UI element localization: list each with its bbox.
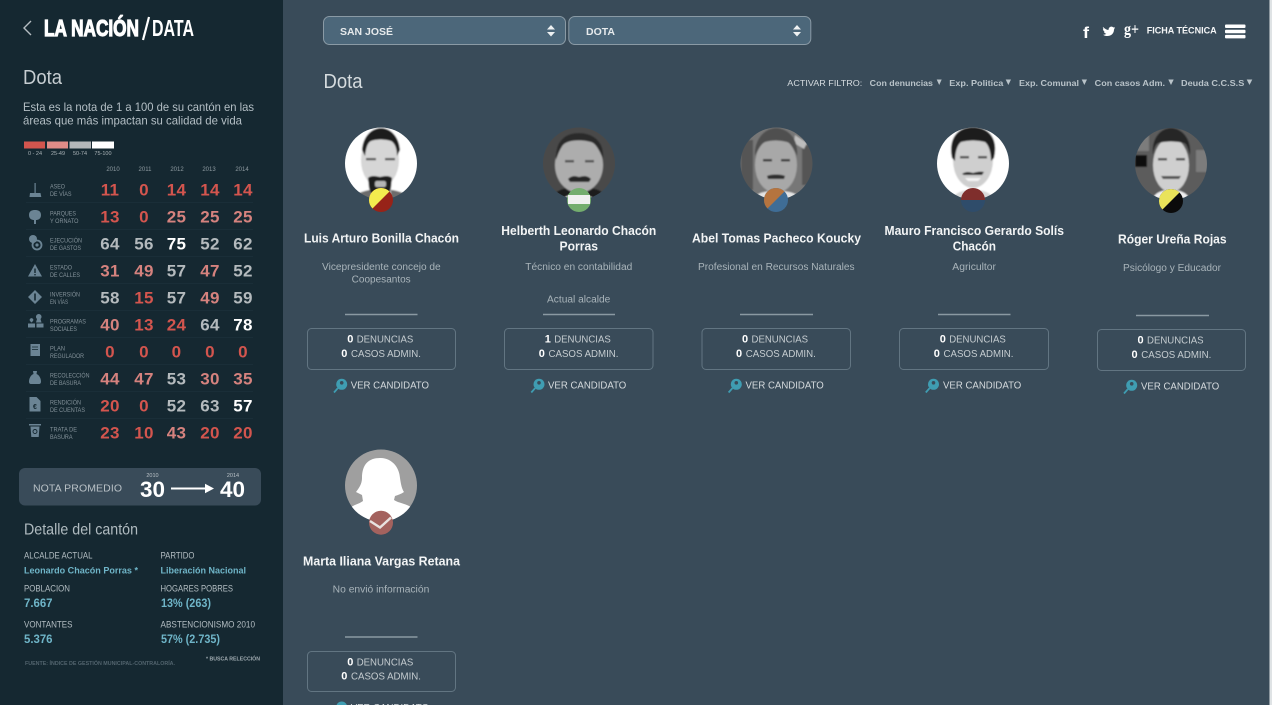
occupation: Psicólogo y Educador	[1123, 263, 1222, 274]
main heading: Dota	[324, 71, 363, 93]
row: aseo de vías: ASEO	[50, 185, 65, 191]
case counts	[900, 328, 1048, 370]
row: inversión en vías: 59	[233, 288, 253, 308]
panel: nota promedio: NOTA PROMEDIO	[33, 483, 122, 495]
link: ver candidato: VER CANDIDATO	[351, 380, 429, 391]
row: rendición de cuentas: €	[33, 404, 37, 411]
case counts: DENUNCIAS	[949, 335, 1006, 346]
portrait placeholder	[345, 449, 417, 524]
row: rendición de cuentas: DE CUENTAS	[50, 408, 85, 414]
row: ejecución de gastos: 62	[233, 234, 253, 254]
case counts: DENUNCIAS	[554, 335, 611, 346]
legend: 75-100	[94, 151, 112, 157]
intro text	[23, 100, 254, 128]
row: plan regulador: PLAN	[50, 347, 65, 353]
party badge	[961, 188, 985, 212]
case counts: 0	[1138, 335, 1144, 347]
row: rendición de cuentas: RENDICIÓN	[50, 400, 81, 407]
logo: La Nación / Data: LA NACIÓN	[44, 14, 139, 41]
row: estado de calles: DE CALLES	[50, 273, 80, 279]
main background	[283, 0, 1272, 705]
row: trata de basura: BASURA	[50, 435, 72, 441]
row: aseo de vías: 14	[233, 180, 253, 200]
case counts: CASOS ADMIN.	[351, 349, 421, 360]
case counts: 0	[341, 348, 347, 360]
legend: 50-74	[73, 151, 87, 157]
canton details: 5.376	[24, 634, 52, 646]
canton details: Liberación Nacional	[160, 566, 246, 577]
case counts: 0	[940, 334, 946, 346]
intro text: áreas que más impactan su calidad de vida	[23, 114, 242, 128]
candidate card: Róger Ureña Rojas	[1098, 123, 1246, 394]
name: Chacón	[953, 239, 996, 254]
row: aseo de vías: 14	[200, 180, 220, 200]
select: cantón: DOTA	[586, 26, 615, 38]
row: aseo de vías: 14	[167, 180, 186, 200]
row: trata de basura	[29, 424, 253, 442]
row: aseo de vías: 11	[101, 180, 119, 200]
row: plan regulador: 0	[238, 342, 248, 362]
year headers: 2014	[235, 167, 249, 173]
party badge	[369, 188, 393, 212]
select: cantón	[569, 16, 811, 44]
scrollbar edge	[1270, 0, 1272, 705]
row: plan regulador: REGULADOR	[50, 354, 85, 360]
case counts: CASOS ADMIN.	[944, 349, 1014, 360]
icon: twitter	[1103, 27, 1115, 36]
case counts: CASOS ADMIN.	[746, 349, 816, 360]
row: rendición de cuentas: 0	[139, 396, 149, 416]
row: aseo de vías	[30, 180, 253, 200]
social icons and menu	[1083, 20, 1246, 42]
row: plan regulador: 0	[105, 342, 115, 362]
row: rendición de cuentas	[30, 396, 253, 416]
row: ejecución de gastos: 75	[167, 234, 186, 254]
case counts: DENUNCIAS	[1147, 336, 1204, 347]
row: plan regulador: 0	[205, 342, 215, 362]
icon: facebook: f	[1083, 25, 1090, 42]
link: ver candidato	[1124, 380, 1220, 394]
legend	[24, 142, 114, 157]
name	[501, 223, 656, 254]
case counts: 0	[934, 348, 940, 360]
row: parques y ornato: Y ORNATO	[50, 219, 79, 225]
case counts: DENUNCIAS	[357, 335, 414, 346]
row: inversión en vías: 15	[134, 288, 154, 308]
case counts: CASOS ADMIN.	[548, 349, 618, 360]
row: trata de basura: TRATA DE	[50, 428, 77, 434]
status badge	[369, 511, 393, 535]
canton details: HOGARES POBRES	[160, 584, 233, 594]
panel: nota promedio: 2014	[227, 473, 239, 479]
name: Marta Iliana Vargas Retana	[303, 553, 461, 568]
row: parques y ornato: 25	[233, 208, 253, 226]
link: ver candidato	[926, 379, 1022, 392]
row: recolección de basura: 30	[200, 370, 220, 388]
link: ver candidato	[531, 379, 627, 392]
row: recolección de basura	[29, 370, 253, 388]
row: inversión en vías: EN VÍAS	[50, 299, 68, 306]
occupation: Agricultor	[952, 262, 997, 273]
name: Abel Tomas Pacheco Koucky	[692, 231, 862, 246]
occupation: No envió información	[333, 585, 429, 596]
row: estado de calles: 47	[200, 262, 220, 280]
canton details: ALCALDE ACTUAL	[24, 551, 92, 561]
canton details: 57% (2.735)	[161, 634, 220, 646]
candidate card: Helberth Leonardo Chacón Porras	[501, 122, 656, 392]
case counts: 0	[347, 334, 353, 346]
link: ver candidato	[334, 379, 429, 392]
row: trata de basura: 23	[100, 424, 120, 442]
filter bar: ACTIVAR FILTRO:	[787, 78, 862, 88]
case counts: DENUNCIAS	[357, 657, 414, 668]
case counts	[504, 328, 653, 370]
name	[884, 223, 1064, 254]
logo: La Nación / Data: DATA	[152, 15, 194, 41]
sidebar heading: Dota	[23, 67, 63, 89]
row: programas sociales: PROGRAMAS	[50, 320, 86, 326]
icon: back arrow	[24, 21, 31, 35]
row: trata de basura: 43	[167, 424, 186, 442]
heading: detalle del cantón: Detalle del cantón	[24, 522, 138, 539]
row: estado de calles: 31	[100, 262, 120, 280]
canton details: 7.667	[24, 598, 52, 610]
row: programas sociales: SOCIALES	[50, 327, 77, 333]
canton details: ABSTENCIONISMO 2010	[160, 620, 255, 630]
case counts: 1	[545, 334, 551, 346]
row: trata de basura: 20	[233, 424, 253, 442]
row: parques y ornato: 25	[167, 208, 186, 226]
row: parques y ornato: 0	[139, 208, 149, 226]
canton details: POBLACION	[24, 584, 70, 594]
row: rendición de cuentas: 57	[233, 396, 253, 416]
score table	[28, 180, 253, 442]
panel: nota promedio: 30	[140, 477, 165, 502]
case counts: 0	[1132, 349, 1138, 361]
case counts	[1098, 330, 1246, 370]
row: plan regulador: 0	[172, 342, 181, 362]
row dividers	[26, 202, 253, 418]
icon: menu	[1225, 24, 1246, 38]
canton details: Leonardo Chacón Porras *	[24, 566, 138, 577]
legend: 25-49	[51, 151, 65, 157]
case counts	[308, 328, 456, 370]
party badge	[764, 188, 788, 212]
panel: nota promedio: 40	[220, 477, 245, 502]
canton details: PARTIDO	[160, 551, 194, 561]
select: provincia: SAN JOSÉ	[340, 25, 393, 38]
link: ver candidato	[336, 702, 429, 705]
row: inversión en vías	[28, 288, 253, 308]
panel: sidebar	[0, 0, 283, 705]
candidate card: Abel Tomas Pacheco Koucky	[692, 122, 862, 392]
row: recolección de basura: 35	[233, 370, 253, 388]
portrait	[1135, 128, 1207, 198]
row: plan regulador: 0	[139, 342, 149, 362]
row: programas sociales: 24	[167, 316, 186, 334]
row: inversión en vías: INVERSIÓN	[50, 292, 80, 299]
case counts: 0	[539, 348, 545, 360]
case counts: CASOS ADMIN.	[1141, 350, 1211, 361]
name: Helberth Leonardo Chacón	[501, 223, 656, 238]
canton details: VONTANTES	[24, 620, 72, 630]
filter bar: Exp. Comunal	[1019, 78, 1079, 88]
canton details: 13% (263)	[161, 598, 211, 610]
row: estado de calles: 52	[233, 262, 253, 280]
year headers: 2012	[170, 167, 184, 173]
intro text: Esta es la nota de 1 a 100 de su cantón en las	[23, 100, 254, 114]
current mayor note: Actual alcalde	[547, 295, 611, 306]
row: inversión en vías: 58	[100, 288, 120, 308]
case counts: 0	[347, 656, 353, 668]
portrait	[740, 128, 812, 198]
row: estado de calles	[28, 262, 253, 280]
row: recolección de basura: DE BASURA	[50, 381, 81, 387]
occupation: Profesional en Recursos Naturales	[698, 262, 855, 273]
occupation	[322, 262, 441, 285]
link: ficha técnica: FICHA TÉCNICA	[1147, 26, 1217, 36]
portrait	[543, 128, 615, 198]
row: inversión en vías: 49	[200, 288, 220, 308]
row: aseo de vías: 0	[139, 180, 149, 200]
source note: FUENTE: ÍNDICE DE GESTIÓN MUNICIPAL-CONTRALORÍA.	[25, 659, 176, 667]
row: aseo de vías: DE VÍAS	[50, 191, 72, 198]
row: parques y ornato: 25	[200, 208, 220, 226]
row: ejecución de gastos	[29, 234, 253, 254]
occupation: Coopesantos	[352, 274, 411, 285]
year headers	[106, 167, 249, 173]
filter bar	[787, 78, 1252, 88]
link: ver candidato: VER CANDIDATO	[1141, 381, 1220, 392]
occupation: Técnico en contabilidad	[525, 262, 632, 273]
row: ejecución de gastos: DE GASTOS	[50, 246, 81, 252]
case counts	[702, 328, 850, 370]
year headers: 2011	[139, 167, 152, 173]
row: trata de basura: 10	[134, 424, 154, 442]
row: estado de calles: 49	[134, 262, 154, 280]
row: rendición de cuentas: 52	[167, 396, 186, 416]
candidate card: Luis Arturo Bonilla Chacón	[304, 122, 459, 392]
case counts: 0	[736, 348, 742, 360]
row: ejecución de gastos: 64	[100, 234, 120, 254]
portrait	[937, 128, 1009, 198]
row: recolección de basura: 47	[134, 370, 154, 388]
arrow: 2010 to 2014	[171, 484, 214, 493]
row: ejecución de gastos: 52	[200, 234, 220, 254]
row: parques y ornato: PARQUES	[50, 212, 76, 218]
name: Mauro Francisco Gerardo Solís	[884, 223, 1064, 238]
link: ver candidato: VER CANDIDATO	[548, 380, 627, 391]
row: programas sociales: 64	[200, 316, 220, 334]
link: ver candidato: VER CANDIDATO	[943, 380, 1022, 391]
occupation: Vicepresidente concejo de	[322, 262, 441, 273]
row: rendición de cuentas: 63	[200, 396, 220, 416]
filter bar: Deuda C.C.S.S	[1181, 78, 1245, 88]
case counts: DENUNCIAS	[752, 335, 808, 346]
panel: nota promedio: 2010	[146, 473, 159, 479]
name: Luis Arturo Bonilla Chacón	[304, 231, 459, 246]
name: Róger Ureña Rojas	[1118, 232, 1227, 247]
row: estado de calles: 57	[167, 262, 186, 280]
row: estado de calles: ESTADO	[50, 266, 72, 272]
party badge	[567, 188, 591, 212]
year headers: 2010	[106, 167, 120, 173]
row: programas sociales	[28, 314, 253, 334]
row: recolección de basura: RECOLECCIÓN	[50, 373, 90, 380]
row: programas sociales: 13	[134, 316, 154, 334]
link: ver candidato	[729, 379, 824, 392]
row: recolección de basura: 53	[167, 370, 186, 388]
case counts: 0	[341, 671, 347, 683]
row: trata de basura: 20	[200, 424, 220, 442]
row: rendición de cuentas: 20	[100, 396, 120, 416]
link: ver candidato: VER CANDIDATO	[746, 380, 824, 391]
filter bar: Con casos Adm.	[1095, 78, 1165, 88]
filter bar: Con denuncias	[870, 78, 933, 88]
portrait	[345, 128, 417, 198]
case counts: 0	[742, 334, 748, 346]
year headers: 2013	[202, 167, 216, 173]
icon: google plus: g+	[1124, 20, 1139, 38]
case counts	[308, 652, 456, 692]
row: recolección de basura: 44	[100, 370, 120, 388]
row: ejecución de gastos: 56	[134, 234, 154, 254]
candidate card: Marta Iliana Vargas Retana	[303, 449, 461, 705]
row: parques y ornato	[29, 208, 253, 226]
footnote: * BUSCA RELECCIÓN	[206, 654, 260, 662]
canton details	[24, 551, 255, 646]
name: Porras	[560, 239, 598, 254]
row: programas sociales: 78	[233, 316, 253, 334]
party badge	[1159, 189, 1183, 213]
panel: nota promedio	[19, 468, 261, 506]
row: plan regulador	[30, 342, 248, 362]
legend: 0 - 24	[28, 151, 42, 157]
row: inversión en vías: 57	[167, 288, 186, 308]
row: parques y ornato: 13	[100, 208, 120, 226]
row: programas sociales: 40	[100, 316, 120, 334]
candidate card: Mauro Francisco Gerardo Solís Chacón	[884, 122, 1064, 392]
select: provincia	[324, 16, 566, 44]
row: ejecución de gastos: EJECUCIÓN	[50, 238, 82, 245]
case counts: CASOS ADMIN.	[351, 672, 421, 683]
filter bar: Exp. Politica	[949, 78, 1004, 88]
